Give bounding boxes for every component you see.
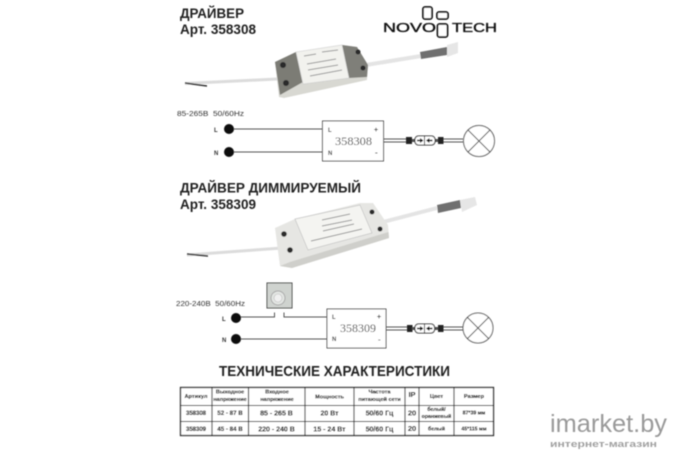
table header row: Входное — [265, 390, 289, 396]
heading: driver 358308 — [180, 6, 256, 37]
wiring diagram: 358308: N — [328, 151, 332, 157]
table header row: питающей сети — [358, 396, 401, 403]
table row: 358309: 220 - 240 В — [258, 426, 295, 434]
table header row: Цвет — [430, 394, 443, 400]
table row: 358309 — [186, 424, 487, 434]
table row: 358309: 50/60 Гц — [366, 426, 394, 434]
table header row: напряжение — [213, 397, 247, 403]
table row: 358308: 20 Вт — [320, 410, 339, 418]
table row: 358309: 358309 — [186, 427, 207, 433]
table row: 358308: оранжевый — [422, 413, 451, 420]
watermark: imarket.by: интернет-магазин — [550, 439, 657, 450]
table row: 358308: 50/60 Гц — [366, 410, 394, 418]
table row: 358308: 85 - 265 В — [260, 410, 293, 418]
product photo: driver 358308 — [185, 42, 458, 98]
heading: driver 358308: Арт. 358308 — [180, 22, 256, 37]
table header row: IP — [408, 390, 416, 399]
table row: 358309: 45 - 84 В — [217, 426, 243, 433]
table header row: напряжение — [260, 397, 294, 403]
wiring diagram: 358308: - — [375, 148, 378, 157]
table header row: Размер — [464, 394, 485, 400]
wiring diagram: 358309: - — [378, 335, 381, 344]
wiring diagram: 358309: N — [332, 337, 336, 343]
table header row — [185, 390, 485, 403]
table header row: Мощность — [315, 394, 344, 400]
table row: 358308: 20 — [408, 408, 416, 418]
icon: dimmer switch — [267, 283, 292, 308]
wiring diagram: 358309: 220-240В 50/60Hz — [176, 301, 246, 308]
wiring diagram: 358309: + — [377, 314, 381, 321]
table header row: Артикул — [185, 394, 208, 400]
wiring diagram: 358309 — [176, 283, 493, 348]
product photo: driver 358309 — [187, 197, 477, 268]
wiring diagram: 358308: 85-265В 50/60Hz — [177, 111, 245, 118]
wiring diagram: 358308: + — [374, 127, 378, 134]
table row: 358308 — [186, 406, 485, 420]
table row: 358308: белый/ — [427, 406, 446, 413]
logo: Novotech: NOVO — [383, 21, 436, 35]
table row: 358308: 87*39 мм — [463, 410, 485, 416]
wiring diagram: 358308: N — [214, 151, 218, 157]
watermark: imarket.by: imarket.by — [550, 410, 668, 438]
wiring diagram: 358309: 358309 — [340, 321, 376, 335]
logo: Novotech — [383, 7, 497, 37]
table row: 358308: 52 - 87 В — [217, 410, 243, 417]
specifications table — [180, 387, 494, 436]
wiring diagram: 358308 — [177, 111, 494, 161]
heading: technical specifications: ТЕХНИЧЕСКИЕ ХАРАКТЕРИСТИКИ — [219, 363, 450, 380]
heading: dimmable driver 358309: ДРАЙВЕР ДИММИРУЕМЫЙ — [180, 180, 361, 196]
table row: 358308: 358308 — [186, 411, 207, 417]
table row: 358309: белый — [428, 426, 445, 432]
table header row: Выходное — [216, 390, 244, 396]
wiring diagram: 358308: 358308 — [335, 134, 372, 148]
heading: dimmable driver 358309: Арт. 358309 — [180, 197, 256, 212]
table row: 358309: 45*115 мм — [461, 426, 487, 432]
logo: Novotech: TECH — [452, 21, 497, 35]
table row: 358309: 15 - 24 Вт — [313, 426, 346, 434]
table row: 358309: 20 — [408, 424, 416, 433]
wiring diagram: 358308: L — [214, 128, 218, 134]
wiring diagram: 358309: L — [222, 317, 226, 323]
table header row: Частота — [369, 390, 391, 396]
watermark: imarket.by — [550, 410, 668, 450]
wiring diagram: 358308: L — [328, 128, 332, 134]
heading: driver 358308: ДРАЙВЕР — [180, 6, 244, 21]
wiring diagram: 358309: L — [332, 315, 336, 321]
wiring diagram: 358309: N — [222, 338, 226, 344]
heading: dimmable driver 358309 — [180, 180, 361, 212]
